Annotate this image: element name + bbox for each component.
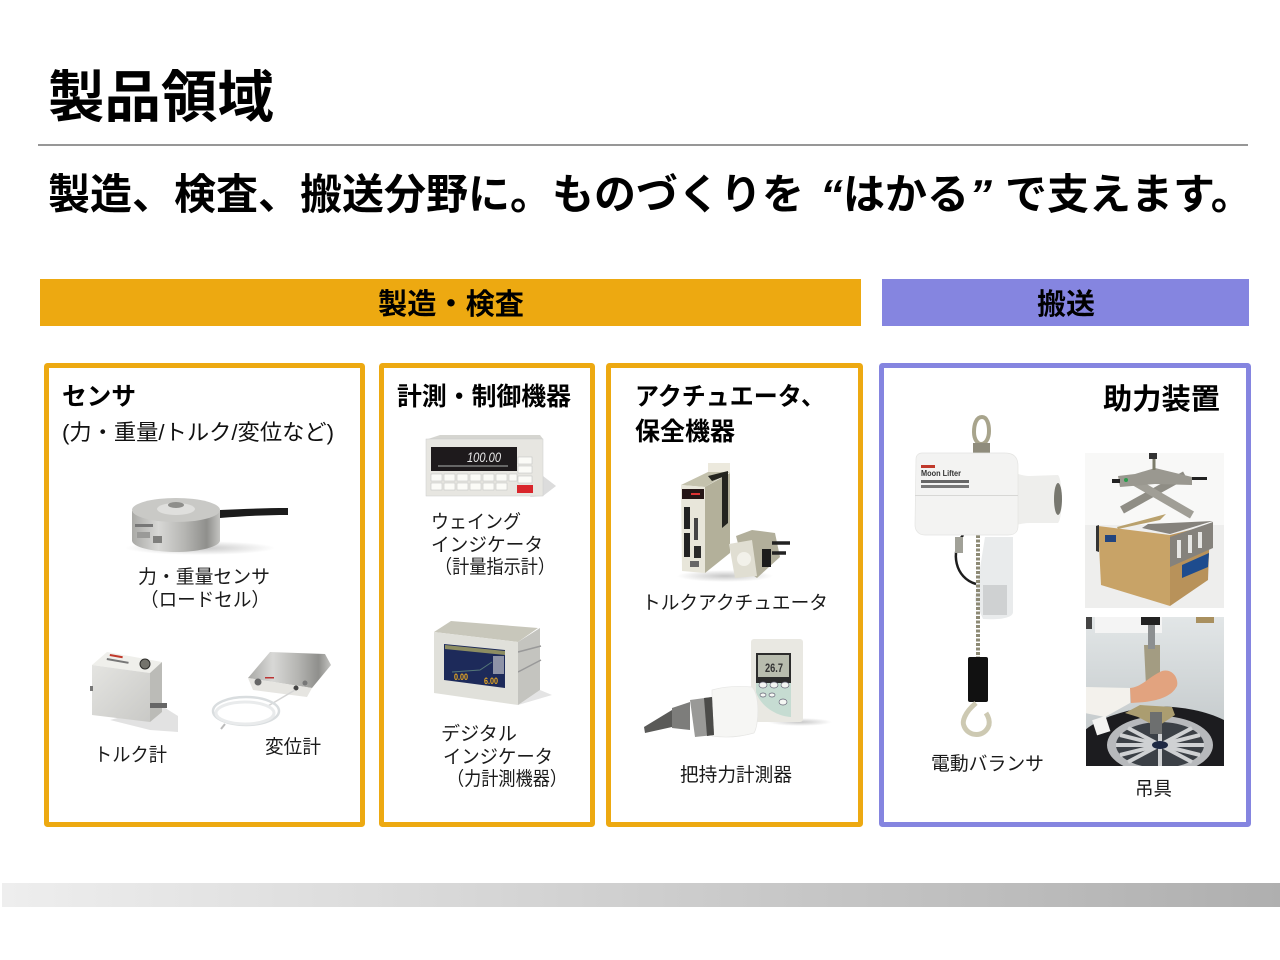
label: force and weight sensor: （ロードセル）	[140, 589, 270, 611]
icon: weighing indicator	[426, 435, 556, 497]
heading: assist devices: 助力装置	[1103, 383, 1220, 416]
label: weighing indicator: （計量指示計）	[435, 556, 555, 578]
label: force and weight sensor	[138, 566, 270, 611]
icon: weighing indicator: 100.00	[467, 449, 501, 465]
label: weighing indicator: インジケータ	[431, 534, 543, 556]
label: force and weight sensor: 力・重量センサ	[138, 566, 270, 588]
subtitle: “	[820, 171, 843, 218]
heading: actuators and maintenance: アクチュエータ、	[635, 383, 825, 411]
label: digital indicator: デジタル	[441, 723, 517, 745]
title: 製品領域	[48, 66, 274, 129]
panel: sensors	[46, 366, 362, 824]
label: lifting tools: 吊具	[1135, 779, 1172, 800]
panel: assist devices	[882, 366, 1248, 824]
icon: torque meter	[90, 652, 178, 732]
label: weighing indicator	[431, 511, 555, 578]
heading: actuators and maintenance: 保全機器	[635, 418, 735, 446]
icon: digital indicator: 0.00	[454, 672, 468, 682]
icon: grip force meter	[644, 639, 832, 737]
footer band	[2, 883, 1280, 907]
label: displacement meter: 変位計	[265, 736, 321, 758]
category bar: manufacturing and inspection: 製造・検査	[378, 288, 524, 321]
label: weighing indicator: ウェイング	[431, 511, 521, 533]
panel: measurement and control	[382, 366, 592, 824]
subtitle: はかる	[843, 171, 969, 218]
image: cardboard box with gripper	[1085, 453, 1224, 608]
heading: actuators and maintenance	[635, 383, 825, 446]
icon: electric balancer	[915, 417, 1062, 734]
panel: actuators and maintenance	[608, 366, 860, 824]
image: wheel being lifted	[1085, 617, 1224, 774]
icon: load cell	[125, 498, 288, 555]
icon: digital indicator	[434, 621, 552, 705]
label: digital indicator	[441, 723, 567, 790]
icon: grip force meter: 26.7	[765, 661, 783, 675]
category bar: transport	[882, 279, 1249, 326]
label: torque actuator: トルクアクチュエータ	[642, 592, 828, 614]
label: digital indicator: インジケータ	[443, 746, 553, 768]
heading: measurement and control: 計測・制御機器	[397, 383, 571, 411]
label: digital indicator: （力計測機器）	[447, 768, 567, 790]
label: electric balancer: 電動バランサ	[931, 753, 1044, 775]
icon: electric balancer: Moon Lifter	[921, 469, 961, 478]
subtitle: ”	[969, 171, 992, 218]
subtitle	[48, 171, 1253, 218]
heading: sensors: センサ	[62, 383, 136, 411]
icon: digital indicator: 6.00	[484, 676, 498, 686]
icon: displacement meter	[213, 652, 331, 729]
subtitle: 製造、検査、搬送分野に。ものづくりを	[48, 171, 804, 218]
text: sensor kinds: (力・重量/トルク/変位など)	[62, 420, 334, 445]
label: torque meter: トルク計	[94, 744, 167, 766]
subtitle: で支えます。	[1005, 171, 1253, 218]
icon: torque actuator	[677, 463, 790, 582]
label: grip force meter: 把持力計測器	[680, 764, 792, 786]
category bar: manufacturing and inspection	[40, 279, 861, 326]
category bar: transport: 搬送	[1037, 288, 1095, 321]
